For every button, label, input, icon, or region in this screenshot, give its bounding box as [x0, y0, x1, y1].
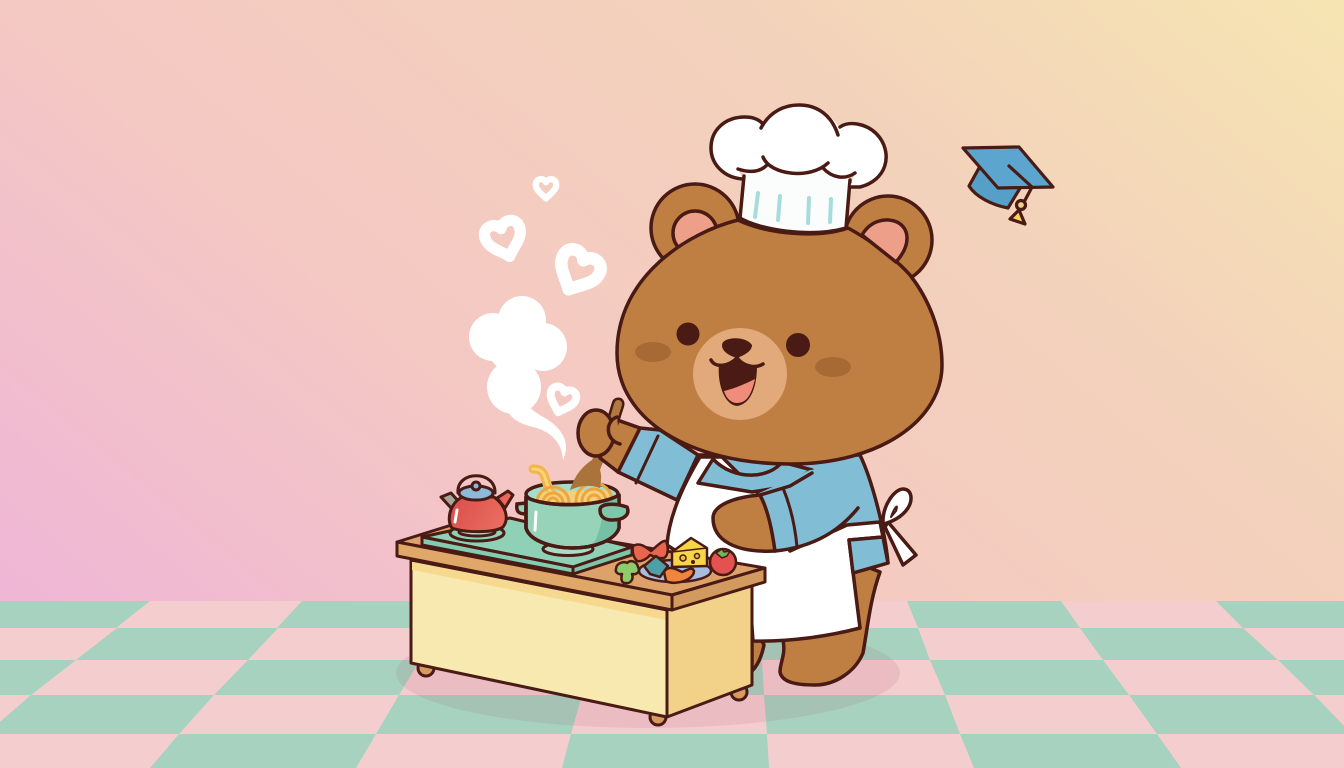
hat puffs fill [711, 105, 886, 187]
food plate with ingredients [616, 538, 736, 583]
wooden spoon [570, 448, 606, 490]
hearts [482, 179, 604, 416]
right inner ear [862, 220, 907, 262]
shirt lower panel [849, 537, 888, 573]
hat band [740, 165, 851, 233]
apron bow [883, 489, 916, 565]
tomato [710, 549, 736, 575]
counter front face [411, 560, 667, 717]
smile [711, 358, 763, 366]
wall background [0, 0, 1344, 601]
bear left arm with hand and spoon handle [578, 399, 698, 500]
broccoli [616, 561, 639, 583]
checkered floor [0, 601, 1344, 768]
noodles [528, 464, 613, 503]
mouth [719, 356, 757, 406]
hat outline and folds [711, 105, 886, 187]
plate [639, 560, 711, 582]
bear ears [651, 184, 932, 284]
chef hat [711, 105, 886, 233]
pot front [526, 495, 628, 550]
pot back and rim [517, 482, 618, 514]
muzzle [693, 328, 787, 420]
counter wheels [418, 660, 747, 725]
counter [397, 518, 765, 725]
shirt collar [698, 459, 812, 492]
bear torso shirt [695, 455, 888, 573]
pot burner [543, 542, 593, 556]
eyes [676, 322, 700, 346]
counter side face [667, 585, 752, 717]
hat stripes [755, 193, 831, 223]
bear right arm [713, 465, 860, 551]
blush [635, 342, 671, 362]
forearm [600, 416, 640, 472]
floor shadow [396, 618, 900, 728]
apron [667, 457, 916, 641]
kettle [441, 476, 513, 541]
cheese [672, 538, 707, 567]
bear legs [752, 560, 880, 685]
bowtie pasta [633, 541, 668, 561]
steam cloud [469, 296, 567, 460]
tongue [724, 379, 755, 403]
bear head [617, 220, 942, 464]
nose [722, 338, 752, 358]
mixed pasta [644, 556, 668, 577]
induction stove [422, 518, 632, 574]
spoon handle [607, 399, 623, 428]
sleeve [618, 428, 698, 500]
counter top board [397, 518, 765, 595]
orange pasta [664, 568, 694, 583]
hand [578, 410, 614, 456]
icon: graduation cap [963, 147, 1053, 224]
